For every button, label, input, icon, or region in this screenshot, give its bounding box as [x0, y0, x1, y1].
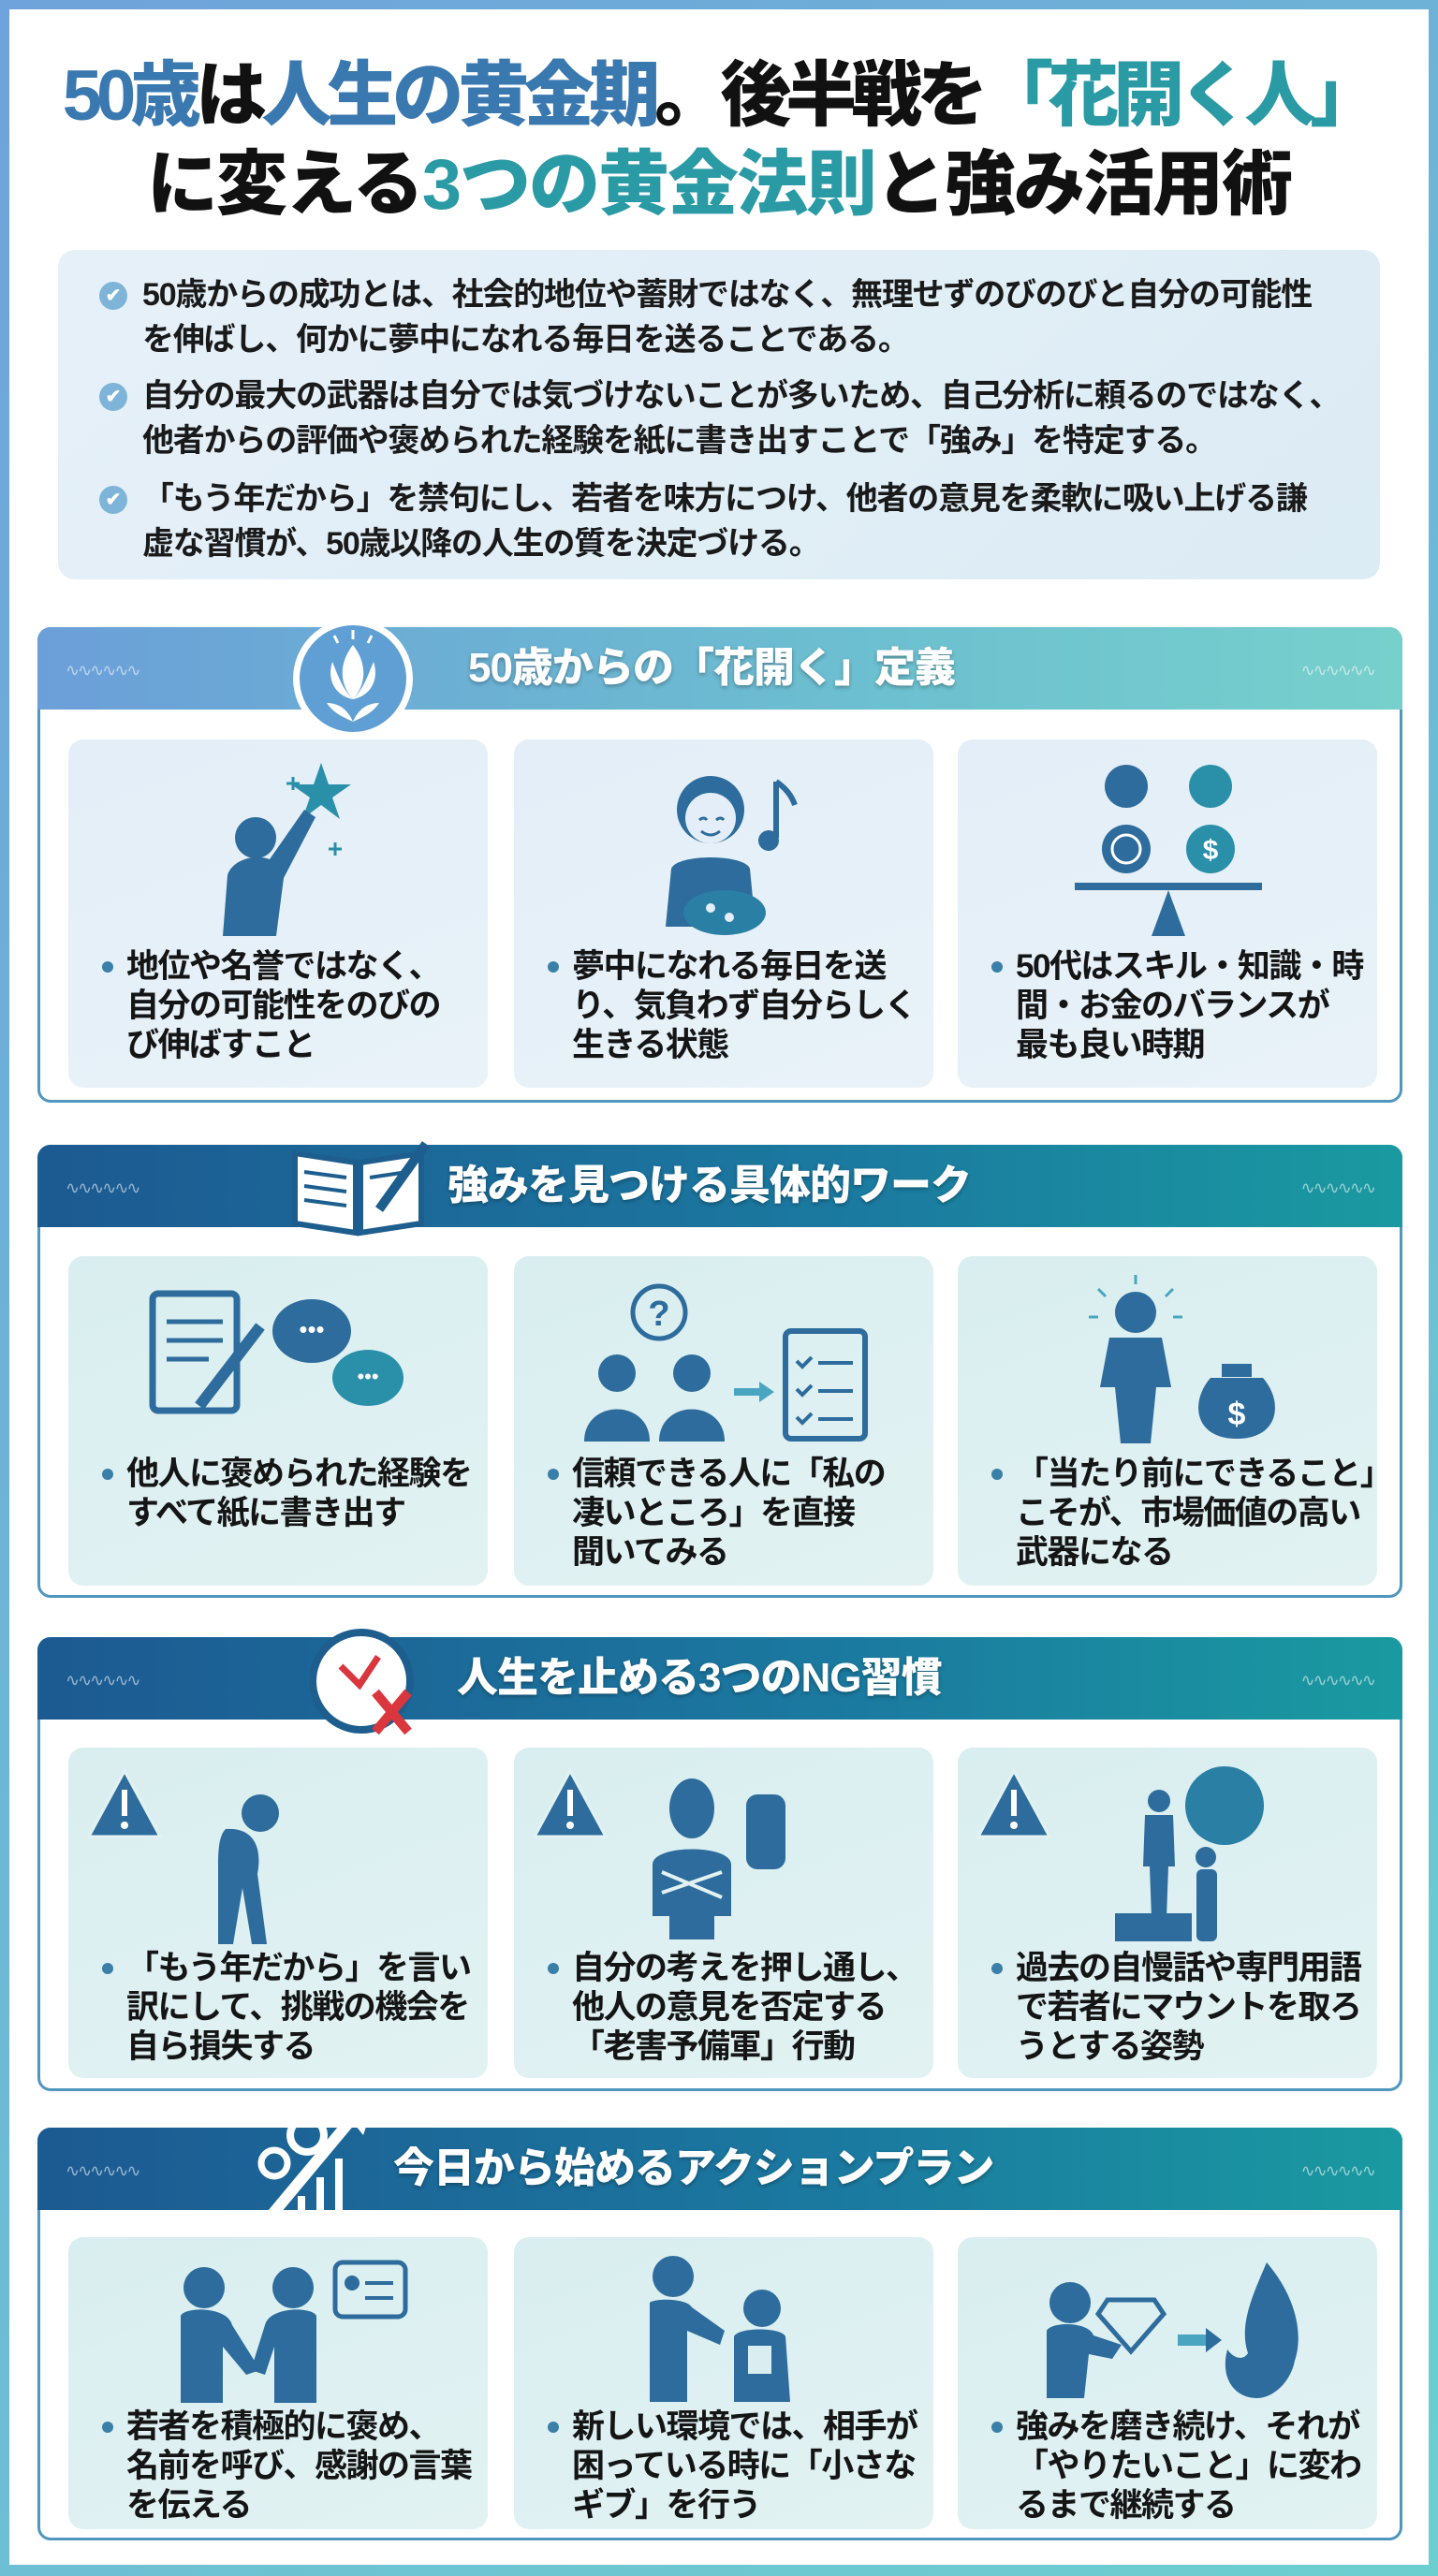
text	[126, 2408, 488, 2525]
icon: painter	[666, 776, 798, 935]
header band 4: ∿∿∿∿∿∿	[1301, 2161, 1374, 2180]
icon: balance: $	[1203, 835, 1219, 866]
text: うとする姿勢	[1016, 2028, 1203, 2065]
heading 1: 50歳からの「花開く」定義	[468, 645, 955, 691]
card 1-3	[958, 739, 1377, 1088]
summary point 2: 自分の最大の武器は自分では気づけないことが多いため、自己分析に頼るのではなく、	[142, 378, 1340, 414]
heading 3: 人生を止める3つのNG習慣	[457, 1655, 941, 1701]
icon: notepad and speech: •••	[357, 1365, 379, 1388]
text	[1016, 2408, 1377, 2525]
text: 武器になる	[1016, 1534, 1173, 1571]
text	[126, 1455, 488, 1533]
summary point 1: を伸ばし、何かに夢中になれる毎日を送ることである。	[142, 322, 909, 358]
heading 4: 今日から始めるアクションプラン	[393, 2145, 993, 2191]
icon: reaching star	[223, 763, 351, 936]
panel: 50歳からの花開く定義	[37, 627, 1402, 1103]
text: 他人に褒められた経験を	[126, 1456, 472, 1492]
panel: 人生を止める3つのNG習慣	[37, 1637, 1402, 2091]
text: 強みを磨き続け、それが	[1016, 2408, 1359, 2445]
icon: people asking	[584, 1284, 868, 1442]
text: 最も良い時期	[1016, 1027, 1204, 1063]
text: 地位や名誉ではなく、	[126, 948, 440, 985]
summary point 2: 他者からの評価や褒められた経験を紙に書き出すことで「強み」を特定する。	[142, 423, 1216, 459]
summary box: ✔	[106, 490, 121, 510]
text: 間・お金のバランスが	[1016, 988, 1328, 1024]
icon: person with money bag	[1089, 1275, 1275, 1443]
icon: gear and growth arrow	[258, 2128, 366, 2210]
card 3-3	[958, 1748, 1377, 2078]
text: 名前を呼び、感謝の言葉	[126, 2448, 472, 2484]
text	[572, 947, 933, 1065]
summary point 1	[99, 277, 1312, 358]
header band 3: ∿∿∿∿∿∿	[66, 1671, 139, 1690]
text: 「老害予備軍」行動	[572, 2028, 855, 2065]
text: 訳にして、挑戦の機会を	[126, 1989, 469, 2026]
summary point 3	[99, 481, 1307, 562]
text: 自分の考えを押し通し、	[572, 1950, 917, 1986]
text: 生きる状態	[572, 1027, 728, 1063]
icon: balance	[1075, 765, 1262, 936]
text: 「当たり前にできること」	[1016, 1456, 1391, 1492]
card 3-2	[514, 1748, 933, 2078]
text: び伸ばすこと	[126, 1027, 315, 1063]
text: 「もう年だから」を言い	[126, 1950, 470, 1986]
text: 新しい環境では、相手が	[572, 2408, 917, 2445]
summary box: ✔	[106, 387, 121, 407]
summary point 3: 虚な習慣が、50歳以降の人生の質を決定づける。	[142, 526, 820, 562]
icon: giving help	[650, 2256, 790, 2402]
text	[126, 947, 488, 1065]
header band 2	[37, 1145, 1402, 1227]
text: すべて紙に書き出す	[126, 1495, 405, 1531]
text: ギブ」を行う	[572, 2487, 760, 2524]
title: 50歳は人生の黄金期。後半戦を「花開く人」	[63, 56, 1375, 136]
text: 若者を積極的に褒め、	[126, 2408, 440, 2445]
text	[1016, 947, 1377, 1065]
text	[572, 2408, 933, 2525]
text: 聞いてみる	[572, 1534, 727, 1571]
summary point 2	[99, 378, 1340, 459]
card 4-1	[68, 2237, 488, 2529]
text: り、気負わず自分らしく	[572, 988, 916, 1024]
text: 他人の意見を否定する	[572, 1989, 886, 2026]
text: 自ら損失する	[126, 2028, 315, 2065]
header band 3: ∿∿∿∿∿∿	[1301, 1671, 1374, 1690]
card 2-3	[958, 1256, 1377, 1586]
icon: warning and tired person	[92, 1769, 279, 1944]
icon: people asking: ?	[648, 1295, 670, 1334]
summary box: ✔	[106, 285, 121, 306]
header band 2: ∿∿∿∿∿∿	[66, 1178, 139, 1197]
icon: handshake	[181, 2260, 408, 2403]
title: に変える3つの黄金法則と強み活用術	[147, 145, 1291, 225]
text: 困っている時に「小さな	[572, 2448, 916, 2484]
icon: open book	[292, 1141, 430, 1236]
summary box	[58, 250, 1380, 579]
text	[1016, 1455, 1377, 1573]
text: 凄いところ」を直接	[572, 1495, 855, 1531]
header band 4: ∿∿∿∿∿∿	[66, 2161, 139, 2180]
icon: clock with x	[309, 1629, 414, 1735]
card 3-1	[68, 1748, 488, 2078]
text: 50代はスキル・知識・時	[1016, 948, 1363, 985]
text: 夢中になれる毎日を送	[572, 948, 886, 985]
text: るまで継続する	[1016, 2487, 1236, 2524]
header band 3	[37, 1637, 1402, 1720]
icon: notepad and speech: •••	[299, 1315, 325, 1343]
text: こそが、市場価値の高い	[1016, 1495, 1360, 1531]
card 4-2	[514, 2237, 933, 2529]
icon: person with money bag: $	[1228, 1397, 1246, 1432]
text: で若者にマウントを取ろ	[1016, 1989, 1361, 2026]
text: 「やりたいこと」に変わ	[1016, 2448, 1361, 2484]
icon: warning and boasting person	[981, 1766, 1264, 1941]
header band 1: ∿∿∿∿∿∿	[1301, 661, 1374, 680]
panel: 今日から始めるアクションプラン	[37, 2128, 1402, 2540]
card 2-1	[68, 1256, 488, 1586]
text	[1016, 1949, 1377, 2067]
icon: warning and refusing person	[537, 1769, 785, 1939]
summary point 3: 「もう年だから」を禁句にし、若者を味方につけ、他者の意見を柔軟に吸い上げる謙	[142, 481, 1307, 517]
header band 2: ∿∿∿∿∿∿	[1301, 1178, 1374, 1197]
text: 信頼できる人に「私の	[572, 1456, 885, 1492]
text	[126, 1949, 488, 2067]
card 2-2	[514, 1256, 933, 1586]
heading 2: 強みを見つける具体的ワーク	[448, 1163, 971, 1208]
card 1-2	[514, 739, 933, 1088]
text: を伝える	[126, 2487, 251, 2524]
card 4-3	[958, 2237, 1377, 2529]
summary point 1: 50歳からの成功とは、社会的地位や蓄財ではなく、無理せずのびのびと自分の可能性	[142, 277, 1312, 313]
icon: notepad and speech	[150, 1290, 404, 1413]
icon: lotus	[293, 625, 413, 732]
icon: diamond to flame	[1047, 2262, 1299, 2398]
header band 1: ∿∿∿∿∿∿	[66, 661, 139, 680]
panel: 強みを見つける具体的ワーク	[37, 1145, 1402, 1598]
text: 自分の可能性をのびの	[126, 988, 440, 1024]
text	[572, 1455, 933, 1573]
text: 過去の自慢話や専門用語	[1016, 1950, 1361, 1986]
card 1-1	[68, 739, 488, 1088]
header band 4	[37, 2128, 1402, 2210]
text	[572, 1949, 933, 2067]
title	[63, 56, 1375, 225]
header band 1	[37, 627, 1402, 710]
